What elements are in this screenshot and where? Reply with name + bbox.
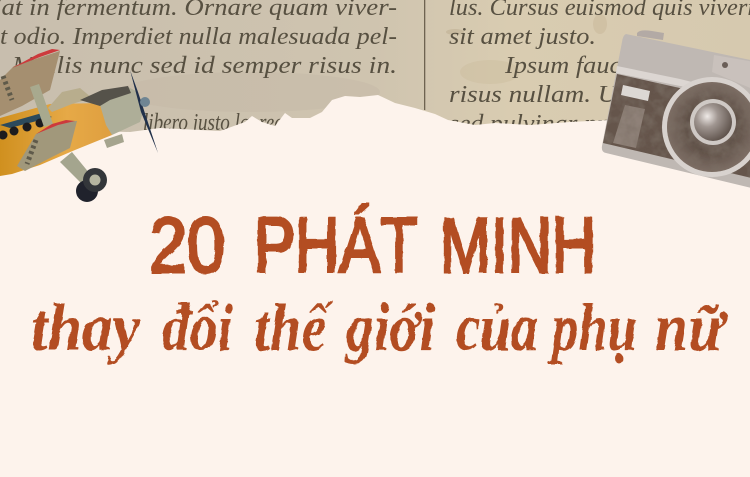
title line 2: giới [344, 289, 435, 365]
title line 2: thế [254, 289, 334, 365]
illustration: watercolor camera [602, 30, 750, 190]
plane cockpit [48, 88, 92, 112]
newspaper text: right column: risus nullam. Ut [449, 82, 627, 108]
plane fuselage [0, 103, 112, 176]
title line 1: PHÁT [254, 201, 418, 289]
title line 2: nữ [655, 289, 728, 365]
camera lens [662, 77, 750, 177]
title [31, 201, 728, 365]
title line 2: đổi [162, 289, 233, 365]
plane propeller [130, 70, 158, 153]
title line 1: 20 [149, 201, 225, 289]
plane blue stripe [0, 113, 52, 128]
plane lower wing [17, 121, 77, 171]
title line 2: phụ [548, 289, 637, 365]
plane wheels [76, 168, 107, 202]
newspaper text: right column: sed pulvinar proin [449, 111, 639, 137]
camera dark band [603, 74, 750, 180]
camera silver shell [602, 34, 750, 190]
camera label [621, 85, 650, 101]
title line 2: của [456, 289, 538, 365]
plane air scoop [104, 134, 124, 148]
camera trim strip [616, 66, 700, 88]
newspaper text: right column [449, 0, 750, 137]
plane cabin windows [0, 118, 44, 140]
title line 1: MINH [440, 201, 596, 289]
plane propeller hub [140, 97, 150, 107]
newspaper text: right column: sit amet justo. [449, 24, 596, 50]
illustration: vintage biplane [0, 49, 158, 202]
title line 2: thay [31, 289, 141, 365]
newspaper text: left column: Mollis nunc sed id semper risus in. [11, 53, 397, 79]
column rule [424, 0, 425, 110]
newspaper text: left column: t odio. Imperdiet nulla malesuada pel- [0, 24, 397, 50]
plane landing gear [60, 152, 90, 186]
camera viewfinder [712, 55, 750, 90]
camera top dial [637, 30, 664, 40]
newspaper text: left column: libero justo laoreet [143, 110, 289, 136]
plane wing strut [30, 84, 53, 127]
plane upper wing [0, 51, 60, 116]
newspaper background [0, 0, 750, 200]
title line 1 [149, 201, 596, 289]
plane engine cowling [100, 87, 143, 135]
newspaper text: right column: Ipsum faucibus [504, 53, 665, 79]
title line 2 [31, 289, 728, 365]
newspaper text: left column [0, 0, 397, 136]
